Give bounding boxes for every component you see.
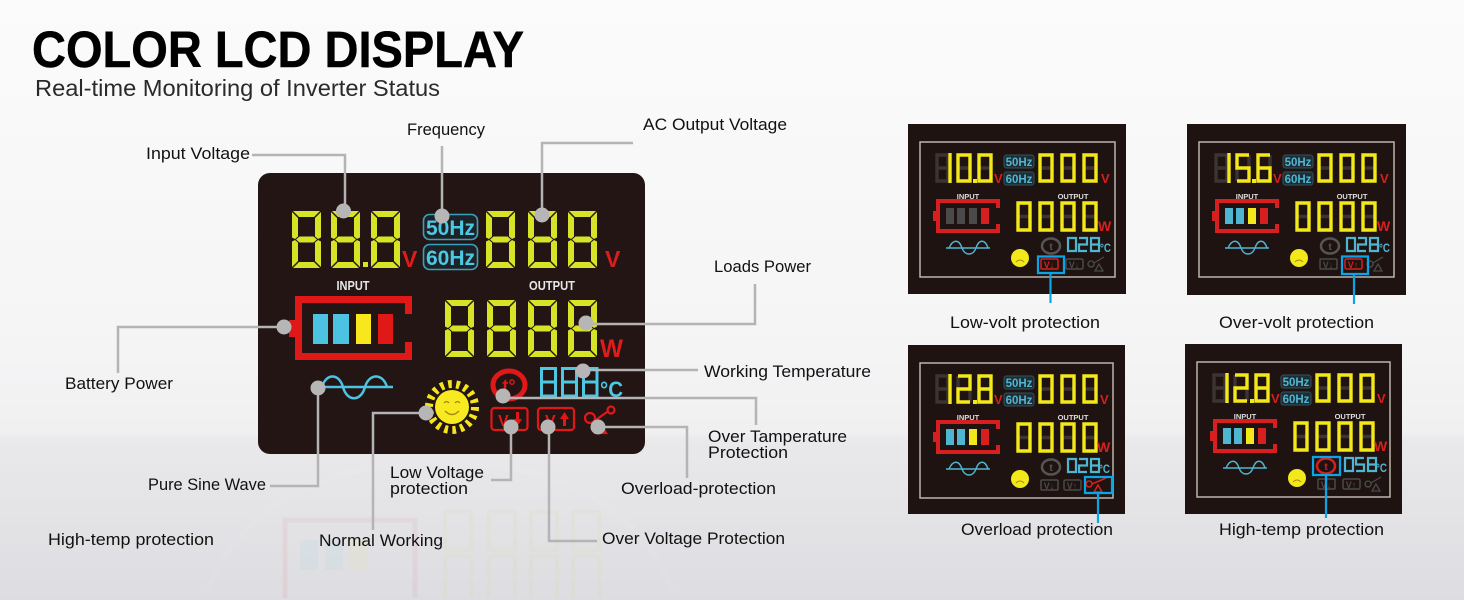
icon: over temperature: t° xyxy=(502,376,516,396)
frequency boxes xyxy=(1004,155,1034,186)
icon: sun xyxy=(429,384,475,430)
callout: battery power xyxy=(65,320,292,393)
panel: high-temp protection: °C xyxy=(1376,461,1387,475)
callout: over voltage protection xyxy=(540,420,785,548)
callout: overload protection: Overload-protection xyxy=(621,479,776,498)
battery: four bars xyxy=(1210,421,1275,451)
high-temp icon xyxy=(1321,238,1339,254)
sad face xyxy=(1288,469,1306,487)
input voltage reading xyxy=(937,153,991,183)
frequency boxes: 60Hz xyxy=(1006,395,1033,407)
high-temp icon xyxy=(1042,238,1060,254)
sad face xyxy=(1290,249,1308,267)
battery: four bars xyxy=(1212,201,1277,231)
input voltage reading xyxy=(1216,153,1270,183)
label: high-temp protection: High-temp protection xyxy=(48,530,214,549)
temperature unit: °C xyxy=(600,377,623,402)
callout: low voltage protection: Low Voltage xyxy=(390,463,484,482)
panel: low-volt protection: OUTPUT xyxy=(1058,192,1089,201)
battery icon xyxy=(289,300,408,356)
frequency boxes xyxy=(1004,376,1034,407)
frequency boxes xyxy=(1281,375,1311,406)
output voltage reading xyxy=(1040,376,1096,402)
high-temp icon: t xyxy=(1049,242,1053,253)
panel: over-volt protection: °C xyxy=(1379,241,1390,255)
OUTPUT label: OUTPUT xyxy=(529,278,575,293)
load power digits xyxy=(445,300,597,357)
callout: over temperature protection: Over Tamperature xyxy=(708,427,847,446)
output voltage reading xyxy=(1319,155,1375,181)
input voltage reading xyxy=(937,374,991,404)
icon: low voltage: V xyxy=(498,413,509,430)
frequency boxes: 60Hz xyxy=(1285,174,1312,186)
panel: over-volt protection: V xyxy=(1380,171,1389,186)
panel: low-volt protection: V xyxy=(994,171,1003,186)
frequency boxes: 50Hz xyxy=(1006,378,1033,390)
panel: overload protection: V xyxy=(994,392,1003,407)
panel: overload protection: °C xyxy=(1099,462,1110,476)
panel: over-volt protection: W xyxy=(1377,218,1391,234)
protection icons: V↓ xyxy=(1323,260,1333,270)
sine wave xyxy=(946,241,990,254)
panel: high-temp protection: V xyxy=(1271,391,1280,406)
callout: overload protection xyxy=(590,420,776,498)
sad face xyxy=(1011,470,1029,488)
panel: high-temp protection: OUTPUT xyxy=(1335,412,1366,421)
temperature reading xyxy=(1347,238,1378,251)
output voltage reading xyxy=(1317,375,1373,401)
callout: working temperature: Working Temperature xyxy=(704,362,871,381)
high-temp icon: t xyxy=(1324,462,1328,473)
panel: overload protection: INPUT xyxy=(957,413,980,422)
callout: frequency: Frequency xyxy=(407,120,485,139)
frequency boxes: 60Hz xyxy=(1283,394,1310,406)
callout: AC output voltage xyxy=(534,115,787,222)
protection icons: V↑ xyxy=(1067,481,1077,491)
title: COLOR LCD DISPLAY xyxy=(32,21,524,78)
label: overload protection: Overload protection xyxy=(961,520,1113,539)
input voltage unit: V xyxy=(402,246,418,272)
icon: low voltage xyxy=(492,408,528,430)
panel: overload protection xyxy=(908,345,1125,523)
battery: one bar xyxy=(933,201,998,231)
protection icons xyxy=(1041,478,1106,492)
sine wave xyxy=(1225,241,1269,254)
panel: main LCD display xyxy=(258,173,645,454)
high-temp icon: t xyxy=(1049,463,1053,474)
highlight and pointer xyxy=(1085,477,1112,523)
icon: over temperature xyxy=(493,371,525,399)
icon: over voltage xyxy=(538,408,574,430)
sine wave xyxy=(946,462,990,475)
frequency boxes: 50Hz xyxy=(1006,157,1033,169)
callout: battery power: Battery Power xyxy=(65,374,173,393)
protection icons: V↓ xyxy=(1044,481,1054,491)
callout: loads power xyxy=(578,257,811,330)
output voltage digits xyxy=(486,211,597,268)
callout: over temperature protection xyxy=(496,388,847,462)
frequency 50Hz: 50Hz xyxy=(426,217,475,240)
panel: overload protection: OUTPUT xyxy=(1058,413,1089,422)
load power unit: W xyxy=(600,335,623,363)
label: high-temp protection: High-temp protection xyxy=(1219,520,1384,539)
frequency boxes xyxy=(1283,155,1313,186)
callout: over temperature protection: Protection xyxy=(708,443,788,462)
protection icons: V↑ xyxy=(1346,480,1356,490)
callout: input voltage xyxy=(146,144,351,218)
highlight and pointer xyxy=(1313,457,1340,518)
panel: low-volt protection: °C xyxy=(1100,241,1111,255)
high-temp icon xyxy=(1042,460,1060,474)
protection icons xyxy=(1318,477,1381,491)
high-temp icon xyxy=(1317,458,1335,474)
frequency boxes: 50Hz xyxy=(1283,377,1310,389)
callout: normal working xyxy=(319,406,443,550)
protection icons: V↓ xyxy=(1069,260,1079,270)
load power reading xyxy=(1018,424,1096,451)
sine wave xyxy=(1223,461,1267,474)
panel: high-temp protection: INPUT xyxy=(1234,412,1257,421)
load power reading xyxy=(1295,423,1373,450)
panel: over-volt protection: OUTPUT xyxy=(1337,192,1368,201)
label: over-volt protection: Over-volt protection xyxy=(1219,313,1374,332)
frequency boxes: 50Hz xyxy=(1285,157,1312,169)
protection icons xyxy=(1320,257,1383,271)
panel: over-volt protection: V xyxy=(1273,171,1282,186)
callout: low voltage protection xyxy=(390,420,518,498)
panel: overload protection: V xyxy=(1100,392,1109,407)
callout: low voltage protection: protection xyxy=(390,479,468,498)
panel: low-volt protection: INPUT xyxy=(957,192,980,201)
protection icons xyxy=(1041,257,1104,271)
icon: pure sine wave xyxy=(318,376,393,398)
panel: low-volt protection: V xyxy=(1101,171,1110,186)
output voltage reading xyxy=(1040,155,1096,181)
callout: working temperature xyxy=(576,362,871,381)
callout: frequency xyxy=(407,120,485,224)
callout: loads power: Loads Power xyxy=(714,257,811,276)
load power reading xyxy=(1297,203,1375,230)
panel: high-temp protection: W xyxy=(1374,438,1388,454)
temperature reading xyxy=(1068,238,1099,251)
icon: over voltage: V xyxy=(545,413,556,430)
callout: pure sine wave: Pure Sine Wave xyxy=(148,475,266,494)
protection icons: V↑ xyxy=(1348,260,1358,270)
protection icons: V↓ xyxy=(1321,480,1331,490)
label: low-volt protection: Low-volt protection xyxy=(950,313,1100,332)
load power reading xyxy=(1018,203,1096,230)
frequency 60Hz: 60Hz xyxy=(426,247,475,270)
panel: high-temp protection: V xyxy=(1377,391,1386,406)
panel: low-volt protection: W xyxy=(1098,218,1112,234)
input voltage digits xyxy=(292,211,400,268)
callout: over voltage protection: Over Voltage Protection xyxy=(602,529,785,548)
temperature digits xyxy=(542,368,597,396)
sad face xyxy=(1011,249,1029,267)
callout: AC output voltage: AC Output Voltage xyxy=(643,115,787,134)
high-temp icon: t xyxy=(1328,242,1332,253)
callout: normal working: Normal Working xyxy=(319,531,443,550)
temperature reading xyxy=(1345,458,1376,471)
output voltage unit: V xyxy=(605,246,621,272)
callout: pure sine wave xyxy=(148,380,326,494)
temperature reading xyxy=(1068,459,1099,472)
INPUT label: INPUT xyxy=(336,278,370,293)
protection icons: V↓ xyxy=(1044,260,1054,270)
input voltage reading xyxy=(1214,373,1268,403)
panel: low-volt protection xyxy=(908,124,1126,303)
battery: four bars xyxy=(933,422,998,452)
callout: input voltage: Input Voltage xyxy=(146,144,250,163)
highlight and pointer xyxy=(1038,256,1064,303)
frequency boxes: 60Hz xyxy=(1006,174,1033,186)
panel: over-volt protection: INPUT xyxy=(1236,192,1259,201)
panel: high-temp protection xyxy=(1185,344,1402,518)
highlight and pointer xyxy=(1342,256,1368,304)
icon: overload xyxy=(585,406,614,433)
panel: overload protection: W xyxy=(1097,439,1111,455)
panel: over-volt protection xyxy=(1187,124,1406,304)
subtitle: Real-time Monitoring of Inverter Status xyxy=(35,75,440,101)
